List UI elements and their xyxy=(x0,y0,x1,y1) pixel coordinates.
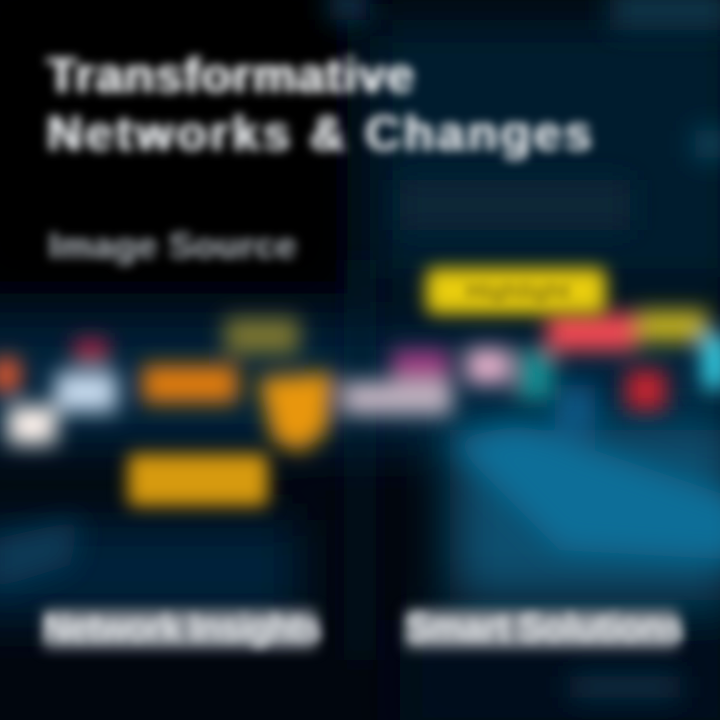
footer band right xyxy=(406,610,678,648)
orange label xyxy=(128,454,268,506)
coloured lights band xyxy=(0,310,720,452)
title second line: Networks & Changes xyxy=(46,107,594,161)
yellow badge xyxy=(426,268,606,314)
footer label left: Network Insights xyxy=(44,607,321,648)
subtitle: Image Source xyxy=(48,225,296,266)
footer band left xyxy=(44,610,316,648)
footer label right: Smart Solutions xyxy=(406,607,684,648)
yellow badge label: Highlight xyxy=(466,278,570,305)
title: Transformative xyxy=(46,49,414,103)
